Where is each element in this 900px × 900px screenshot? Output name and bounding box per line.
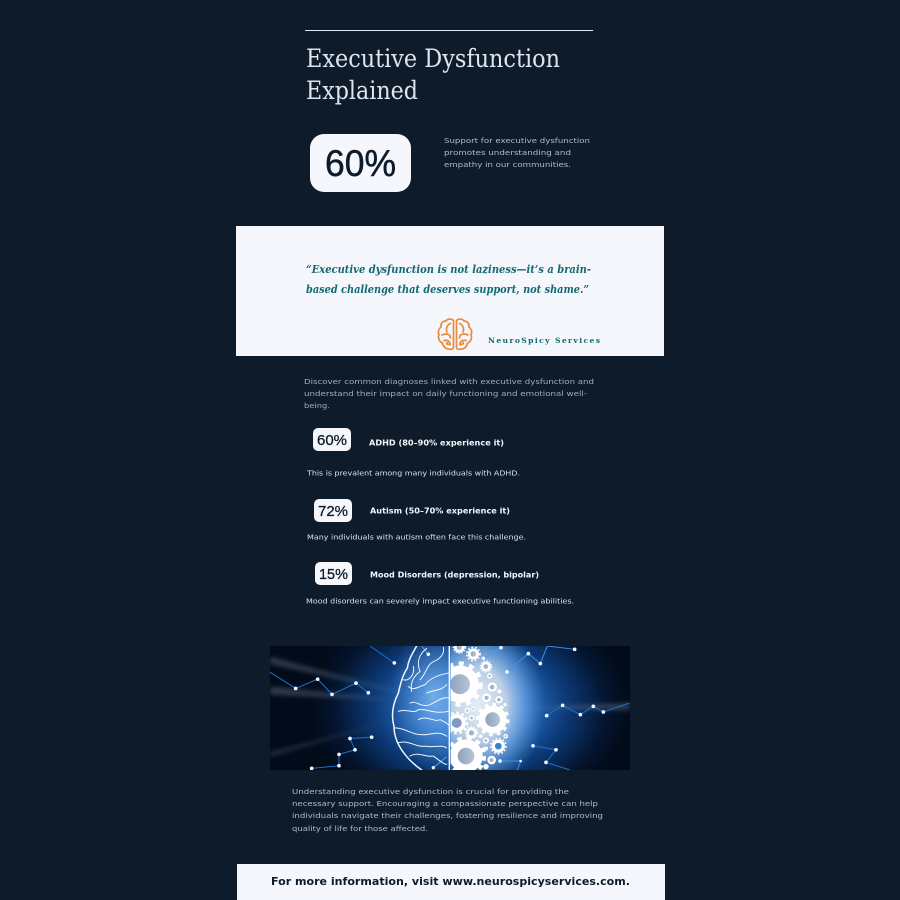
item: ADHD: This is prevalent among many individuals with ADHD. [306, 468, 520, 478]
item: ADHD: ADHD (80–90% experience it) [369, 438, 504, 448]
panel: quote [236, 226, 664, 356]
quote text [306, 263, 591, 296]
item: Mood Disorders: Mood Disorders (depression, bipolar) [370, 570, 539, 580]
item: Autism: Autism (50–70% experience it) [370, 506, 510, 516]
brand name: NeuroSpicy Services [488, 336, 600, 345]
gears [450, 646, 510, 770]
title: Explained [306, 76, 418, 106]
support text: Support for executive dysfunction [444, 136, 590, 145]
item: Mood Disorders: 15% [319, 566, 348, 583]
network lines [270, 646, 629, 770]
title: Executive Dysfunction [306, 44, 560, 74]
quote text: based challenge that deserves support, not shame.” [306, 283, 589, 296]
intro text: Discover common diagnoses linked with executive dysfunction and [304, 377, 594, 386]
item: Autism: Many individuals with autism often face this challenge. [307, 532, 526, 542]
item: Autism [307, 499, 526, 542]
closing paragraph: quality of life for those affected. [292, 824, 428, 833]
icon: orange brain logo [438, 319, 472, 349]
closing paragraph: necessary support. Encouraging a compassionate perspective can help [292, 799, 598, 808]
brain half [393, 646, 449, 770]
quote text: “Executive dysfunction is not laziness—it’s a brain- [306, 263, 591, 276]
stat badge: 60%: 60% [325, 143, 396, 184]
support text: empathy in our communities. [444, 160, 571, 169]
image: brain and gears [270, 646, 630, 770]
item: ADHD [306, 428, 520, 478]
item: Mood Disorders [306, 562, 574, 606]
network nodes [294, 646, 605, 770]
intro text [304, 377, 594, 410]
stat badge: 60% [310, 134, 411, 192]
intro text: understand their impact on daily functioning and emotional well- [304, 389, 587, 398]
item: Autism: 72% [318, 503, 348, 520]
intro text: being. [304, 401, 330, 410]
footer call to action: For more information, visit www.neurospicyservices.com. [271, 876, 630, 888]
support text [444, 136, 590, 169]
item: ADHD: 60% [317, 432, 347, 449]
footer call to action [237, 864, 665, 900]
title [306, 44, 560, 106]
item: Mood Disorders: Mood disorders can severely impact executive functioning abilities. [306, 596, 574, 606]
light rays [270, 657, 630, 756]
closing paragraph: Understanding executive dysfunction is crucial for providing the [292, 787, 570, 796]
closing paragraph [292, 787, 603, 833]
support text: promotes understanding and [444, 148, 571, 157]
closing paragraph: individuals navigate their challenges, fostering resilience and improving [292, 811, 603, 820]
